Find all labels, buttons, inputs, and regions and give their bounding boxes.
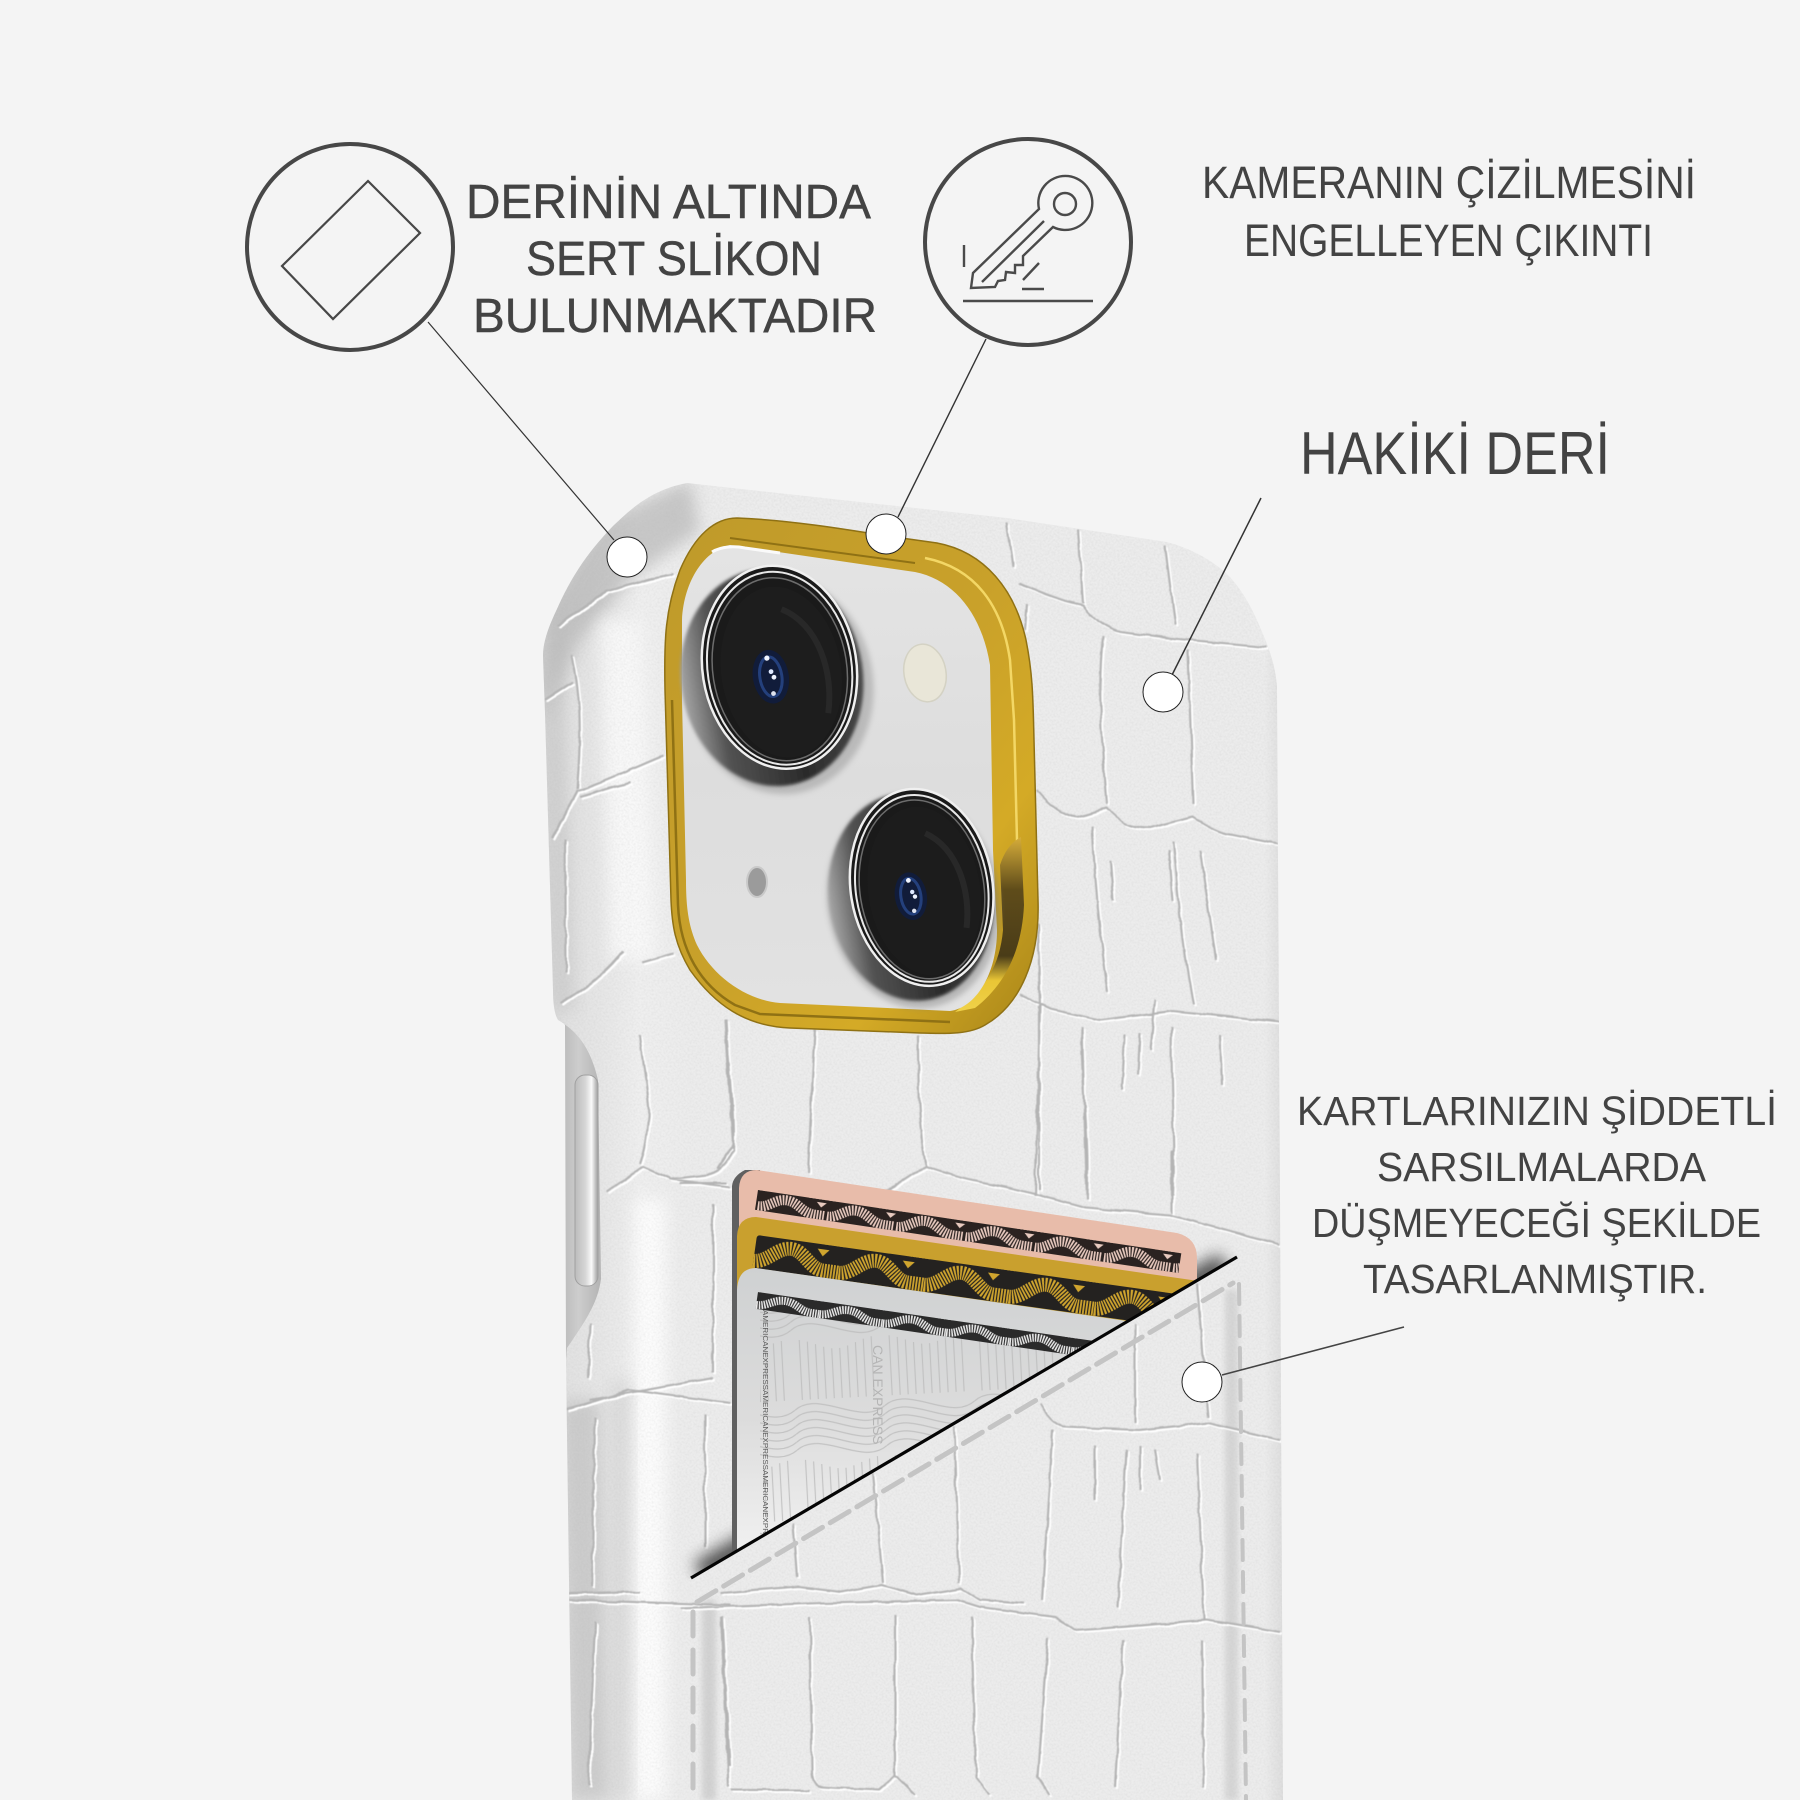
heading: silicone text: SERT SLİKON bbox=[526, 233, 822, 286]
callout: leather leader bbox=[1143, 498, 1261, 712]
marker dot bbox=[1143, 672, 1183, 712]
marker dot bbox=[866, 514, 906, 554]
corner shading bbox=[543, 480, 700, 720]
leader line bbox=[898, 339, 986, 517]
silver card guilloche bbox=[760, 1312, 1054, 1534]
main lens bbox=[665, 552, 889, 808]
right vertical stitching bbox=[1239, 1284, 1246, 1800]
cards bbox=[732, 1170, 1197, 1551]
leather grain bbox=[582, 490, 1273, 1800]
camera module bbox=[665, 518, 1038, 1033]
ring highlight bbox=[925, 558, 1018, 880]
pocket fold shading bbox=[702, 1600, 716, 1800]
ring top inner line bbox=[730, 538, 915, 563]
plate glare bbox=[712, 547, 780, 553]
marker dot bbox=[1182, 1362, 1222, 1402]
card microtext: AMERICANEXPRESSAMERICANEXPRESSAMERICANEXPRESS bbox=[761, 1310, 768, 1550]
rose gold card bbox=[739, 1170, 1197, 1280]
silver card bbox=[737, 1268, 1126, 1550]
gold card pattern strip bbox=[752, 1235, 1178, 1327]
text: card security: TASARLANMIŞTIR. bbox=[1363, 1256, 1707, 1302]
heading: silicone text bbox=[466, 176, 877, 343]
text: camera protection bbox=[1202, 157, 1696, 266]
crocodile cell lines bbox=[545, 522, 1281, 1795]
left vertical stitching bbox=[690, 1612, 696, 1800]
diagonal stitching bbox=[697, 1283, 1233, 1602]
leader line bbox=[1172, 498, 1261, 675]
lens pupil bbox=[749, 647, 793, 706]
microphone bbox=[747, 867, 767, 897]
phone case bbox=[530, 470, 1300, 1800]
second lens bbox=[811, 778, 1015, 1021]
icon: key bbox=[963, 176, 1093, 301]
flash bbox=[899, 641, 951, 705]
side button bbox=[575, 1075, 598, 1286]
rose card pattern strip bbox=[755, 1190, 1181, 1273]
key icon circle bbox=[925, 139, 1131, 345]
text: card security: SARSILMALARDA bbox=[1377, 1144, 1707, 1190]
callout: pocket leader bbox=[1182, 1327, 1404, 1402]
crocodile cell highlights bbox=[547, 524, 1283, 1797]
text: camera protection: KAMERANIN ÇİZİLMESİNİ bbox=[1202, 157, 1696, 208]
gold camera ring bbox=[665, 518, 1038, 1033]
heading: genuine leather: HAKİKİ DERİ bbox=[1300, 420, 1610, 487]
gold card bbox=[737, 1217, 1194, 1321]
ring mirror reflection bbox=[955, 837, 1024, 1012]
text: card security: DÜŞMEYECEĞİ ŞEKİLDE bbox=[1312, 1200, 1761, 1246]
card faint lettering: CAN EXPRESS bbox=[870, 1345, 886, 1445]
leather case body bbox=[530, 470, 1300, 1800]
marker dot bbox=[607, 537, 647, 577]
lens shadow bbox=[669, 561, 889, 808]
callout: key scratch bbox=[866, 139, 1131, 554]
text: card security: KARTLARINIZIN ŞİDDETLİ bbox=[1297, 1088, 1777, 1134]
ring dark bevel bbox=[672, 700, 950, 1022]
leader line bbox=[1222, 1327, 1404, 1375]
heading: silicone text: BULUNMAKTADIR bbox=[473, 290, 877, 343]
card pocket bbox=[691, 1170, 1246, 1800]
text: card security bbox=[1297, 1088, 1777, 1302]
heading: silicone text: DERİNİN ALTINDA bbox=[466, 176, 871, 229]
card edge bbox=[732, 1170, 760, 1551]
silver card pattern strip bbox=[756, 1292, 1092, 1354]
silicone icon circle bbox=[247, 144, 453, 350]
pocket shadow bbox=[700, 1264, 1225, 1573]
callout: silicone bbox=[247, 144, 647, 577]
camera plate bbox=[682, 545, 997, 1011]
leader line bbox=[428, 322, 614, 540]
second lens pupil bbox=[891, 870, 930, 922]
text: camera protection: ENGELLEYEN ÇIKINTI bbox=[1244, 215, 1653, 266]
icon: card outline bbox=[282, 181, 420, 319]
pocket opening edge bbox=[691, 1257, 1237, 1578]
side phone metal frame bbox=[557, 1015, 612, 1362]
